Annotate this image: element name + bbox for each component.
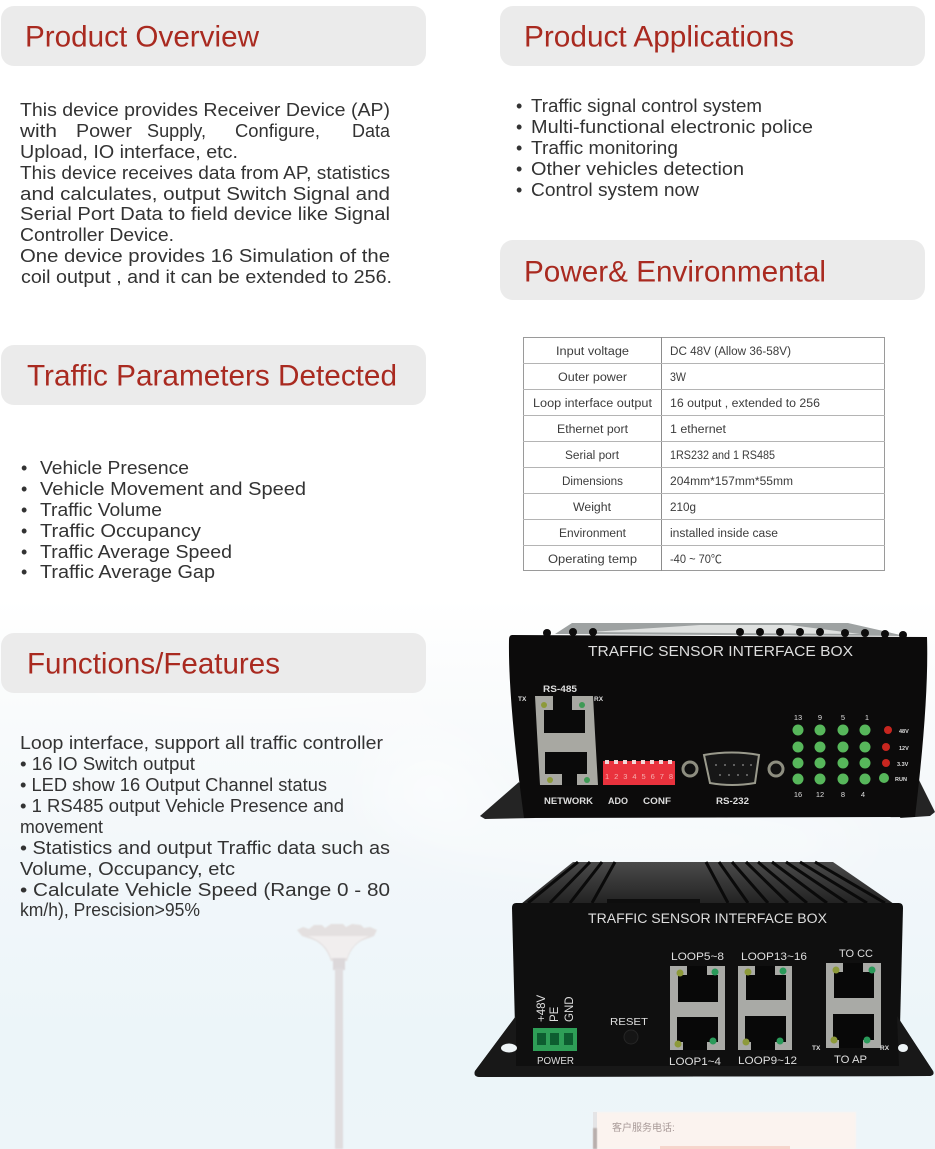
billboard sign — [593, 1112, 856, 1149]
list: applications: Multi-functional electronic police — [531, 117, 813, 137]
text block: overview: This device provides Receiver Device (AP) — [20, 100, 390, 120]
table: power and environmental specs: Environment — [559, 528, 627, 540]
table: power and environmental specs: 3W — [670, 372, 686, 384]
list: traffic parameters: • — [21, 542, 27, 562]
table: power and environmental specs — [523, 337, 885, 571]
status LED grid: 13 — [794, 713, 802, 722]
table: power and environmental specs: Weight — [573, 502, 612, 514]
list: traffic parameters: Vehicle Movement and Speed — [40, 479, 306, 499]
list: traffic parameters: • — [21, 562, 27, 582]
text block: overview: Supply, — [147, 121, 206, 141]
heading: Functions/Features — [1, 633, 426, 693]
power connector: GND — [564, 996, 576, 1022]
table: power and environmental specs: 210g — [670, 502, 696, 514]
heading: Traffic Parameters Detected: Traffic Parameters Detected — [27, 360, 397, 392]
list: traffic parameters: Traffic Occupancy — [40, 521, 201, 541]
heading: Product Applications: Product Applications — [524, 20, 794, 54]
list: applications: • — [516, 180, 522, 200]
list: traffic parameters: • — [21, 458, 27, 478]
text block: overview: Controller Device. — [20, 225, 174, 245]
text block: overview: coil output , and it can be extended to 256. — [21, 267, 392, 287]
text block: overview: Configure, — [235, 121, 320, 141]
power connector: PE — [549, 1006, 561, 1022]
heading: Power & Environmental — [500, 240, 925, 300]
loop ports: LOOP9~12 — [738, 1055, 797, 1067]
loop ports: TO AP — [834, 1054, 867, 1066]
loop ports: LOOP5~8 — [671, 951, 724, 963]
reset button: RESET — [610, 1016, 649, 1028]
list: traffic parameters — [21, 458, 306, 582]
list: applications: • — [516, 138, 522, 158]
table: power and environmental specs: Serial port — [565, 450, 620, 462]
list: traffic parameters: Vehicle Presence — [40, 458, 189, 478]
text block: overview: Serial Port Data to field device like Signal — [20, 204, 390, 224]
status LED grid: 3.3V — [897, 762, 909, 768]
RS-485 network port: NETWORK — [544, 796, 593, 807]
device photo: front panel with RS-485 and LEDs — [480, 623, 935, 819]
text block: features: • Statistics and output Traffic data such as — [20, 838, 390, 858]
status LED grid: 5 — [841, 713, 845, 722]
DIP switch: 12345678 — [605, 772, 673, 781]
status LED grid: 8 — [841, 790, 845, 799]
text block: overview: Upload, IO interface, etc. — [20, 142, 238, 162]
table: power and environmental specs: 204mm*157mm*55mm — [670, 476, 793, 488]
device title: TRAFFIC SENSOR INTERFACE BOX — [588, 644, 853, 660]
status LED grid — [792, 713, 909, 799]
list: applications: Traffic monitoring — [531, 138, 678, 158]
table: power and environmental specs: installed inside case — [670, 528, 778, 540]
status LED grid: 12 — [816, 790, 824, 799]
DIP switch — [603, 760, 675, 785]
table: power and environmental specs: -40 ~ 70℃ — [670, 554, 722, 566]
heading: Traffic Parameters Detected — [1, 345, 426, 405]
list: traffic parameters: Traffic Average Speed — [40, 542, 232, 562]
list: applications: • — [516, 96, 522, 116]
RS-485 network port: RX — [594, 696, 604, 703]
heading: Product Applications — [500, 6, 925, 66]
list: traffic parameters: • — [21, 479, 27, 499]
list: traffic parameters: • — [21, 521, 27, 541]
list: applications: • — [516, 159, 522, 179]
table: power and environmental specs: 16 output , extended to 256 — [670, 398, 820, 410]
loop ports: TX — [812, 1045, 821, 1052]
text block: overview: One device provides 16 Simulation of the — [20, 246, 390, 266]
status LED grid: 4 — [861, 790, 865, 799]
table: power and environmental specs: Ethernet port — [557, 424, 629, 436]
text block: features: Volume, Occupancy, etc — [20, 859, 235, 879]
RS-232 connector: RS-232 — [716, 796, 749, 807]
heading: Product Overview — [1, 6, 426, 66]
list: traffic parameters: Traffic Average Gap — [40, 562, 215, 582]
table: power and environmental specs: Dimensions — [562, 476, 623, 488]
text block: features: • Calculate Vehicle Speed (Range 0 - 80 — [20, 880, 390, 900]
table: power and environmental specs: Operating temp — [548, 554, 637, 566]
RS-232 connector — [683, 752, 783, 807]
power connector: POWER — [537, 1055, 574, 1067]
text block: overview: and calculates, output Switch Signal and — [20, 184, 390, 204]
list: applications: • — [516, 117, 522, 137]
billboard sign: 客户服务电话: — [612, 1121, 675, 1134]
table: power and environmental specs: 1 ethernet — [670, 424, 727, 436]
list: applications — [516, 96, 813, 200]
list: applications: Control system now — [531, 180, 700, 200]
loop ports: RX — [880, 1045, 890, 1052]
device title: TRAFFIC SENSOR INTERFACE BOX — [588, 911, 827, 926]
text block: overview: Power — [76, 121, 132, 141]
heading: Power & Environmental: Power& Environmental — [524, 256, 826, 288]
RS-485 network port: CONF — [643, 796, 671, 807]
device photo: rear panel with loop ports — [475, 862, 934, 1077]
heading: Functions/Features: Functions/Features — [27, 648, 280, 680]
text block: features: movement — [20, 817, 103, 837]
heading: Product Overview: Product Overview — [25, 20, 259, 54]
table: power and environmental specs: 1RS232 and 1 RS485 — [670, 450, 775, 462]
table: power and environmental specs: Outer power — [558, 372, 627, 384]
RS-485 network port — [518, 684, 671, 807]
list: traffic parameters: • — [21, 500, 27, 520]
table: power and environmental specs: Loop interface output — [533, 398, 653, 410]
list: applications: Other vehicles detection — [531, 159, 744, 179]
loop ports — [669, 948, 890, 1068]
text block: overview: This device receives data from AP, statistics — [20, 163, 390, 183]
power connector: +48V — [536, 994, 548, 1022]
status LED grid: 16 — [794, 790, 802, 799]
text block: features: • 1 RS485 output Vehicle Presence and — [20, 796, 344, 816]
power connector — [533, 994, 577, 1067]
loop ports: TO CC — [839, 948, 873, 960]
text block: features: • LED show 16 Output Channel status — [20, 775, 327, 795]
status LED grid: 9 — [818, 713, 822, 722]
RS-485 network port: RS-485 — [543, 684, 578, 695]
list: traffic parameters: Traffic Volume — [40, 500, 162, 520]
table: power and environmental specs: Input voltage — [556, 346, 629, 358]
status LED grid: RUN — [895, 777, 907, 783]
list: applications: Traffic signal control system — [531, 96, 762, 116]
table: power and environmental specs: DC 48V (Allow 36-58V) — [670, 346, 791, 358]
text block: features — [20, 733, 390, 920]
lamp post — [297, 924, 377, 1149]
reset button — [610, 1016, 649, 1044]
RS-485 network port: TX — [518, 696, 527, 703]
loop ports: LOOP1~4 — [669, 1056, 721, 1068]
status LED grid: 48V — [899, 729, 909, 735]
status LED grid: 12V — [899, 746, 909, 752]
text block: overview: with — [19, 121, 57, 141]
status LED grid: 1 — [865, 713, 869, 722]
text block: overview — [19, 100, 392, 287]
text block: features: • 16 IO Switch output — [20, 754, 195, 774]
text block: features: km/h), Prescision>95% — [20, 900, 200, 920]
loop ports: LOOP13~16 — [741, 951, 807, 963]
text block: overview: Data — [352, 121, 391, 141]
RS-485 network port: ADO — [608, 796, 628, 807]
text block: features: Loop interface, support all traffic controller — [20, 733, 383, 753]
